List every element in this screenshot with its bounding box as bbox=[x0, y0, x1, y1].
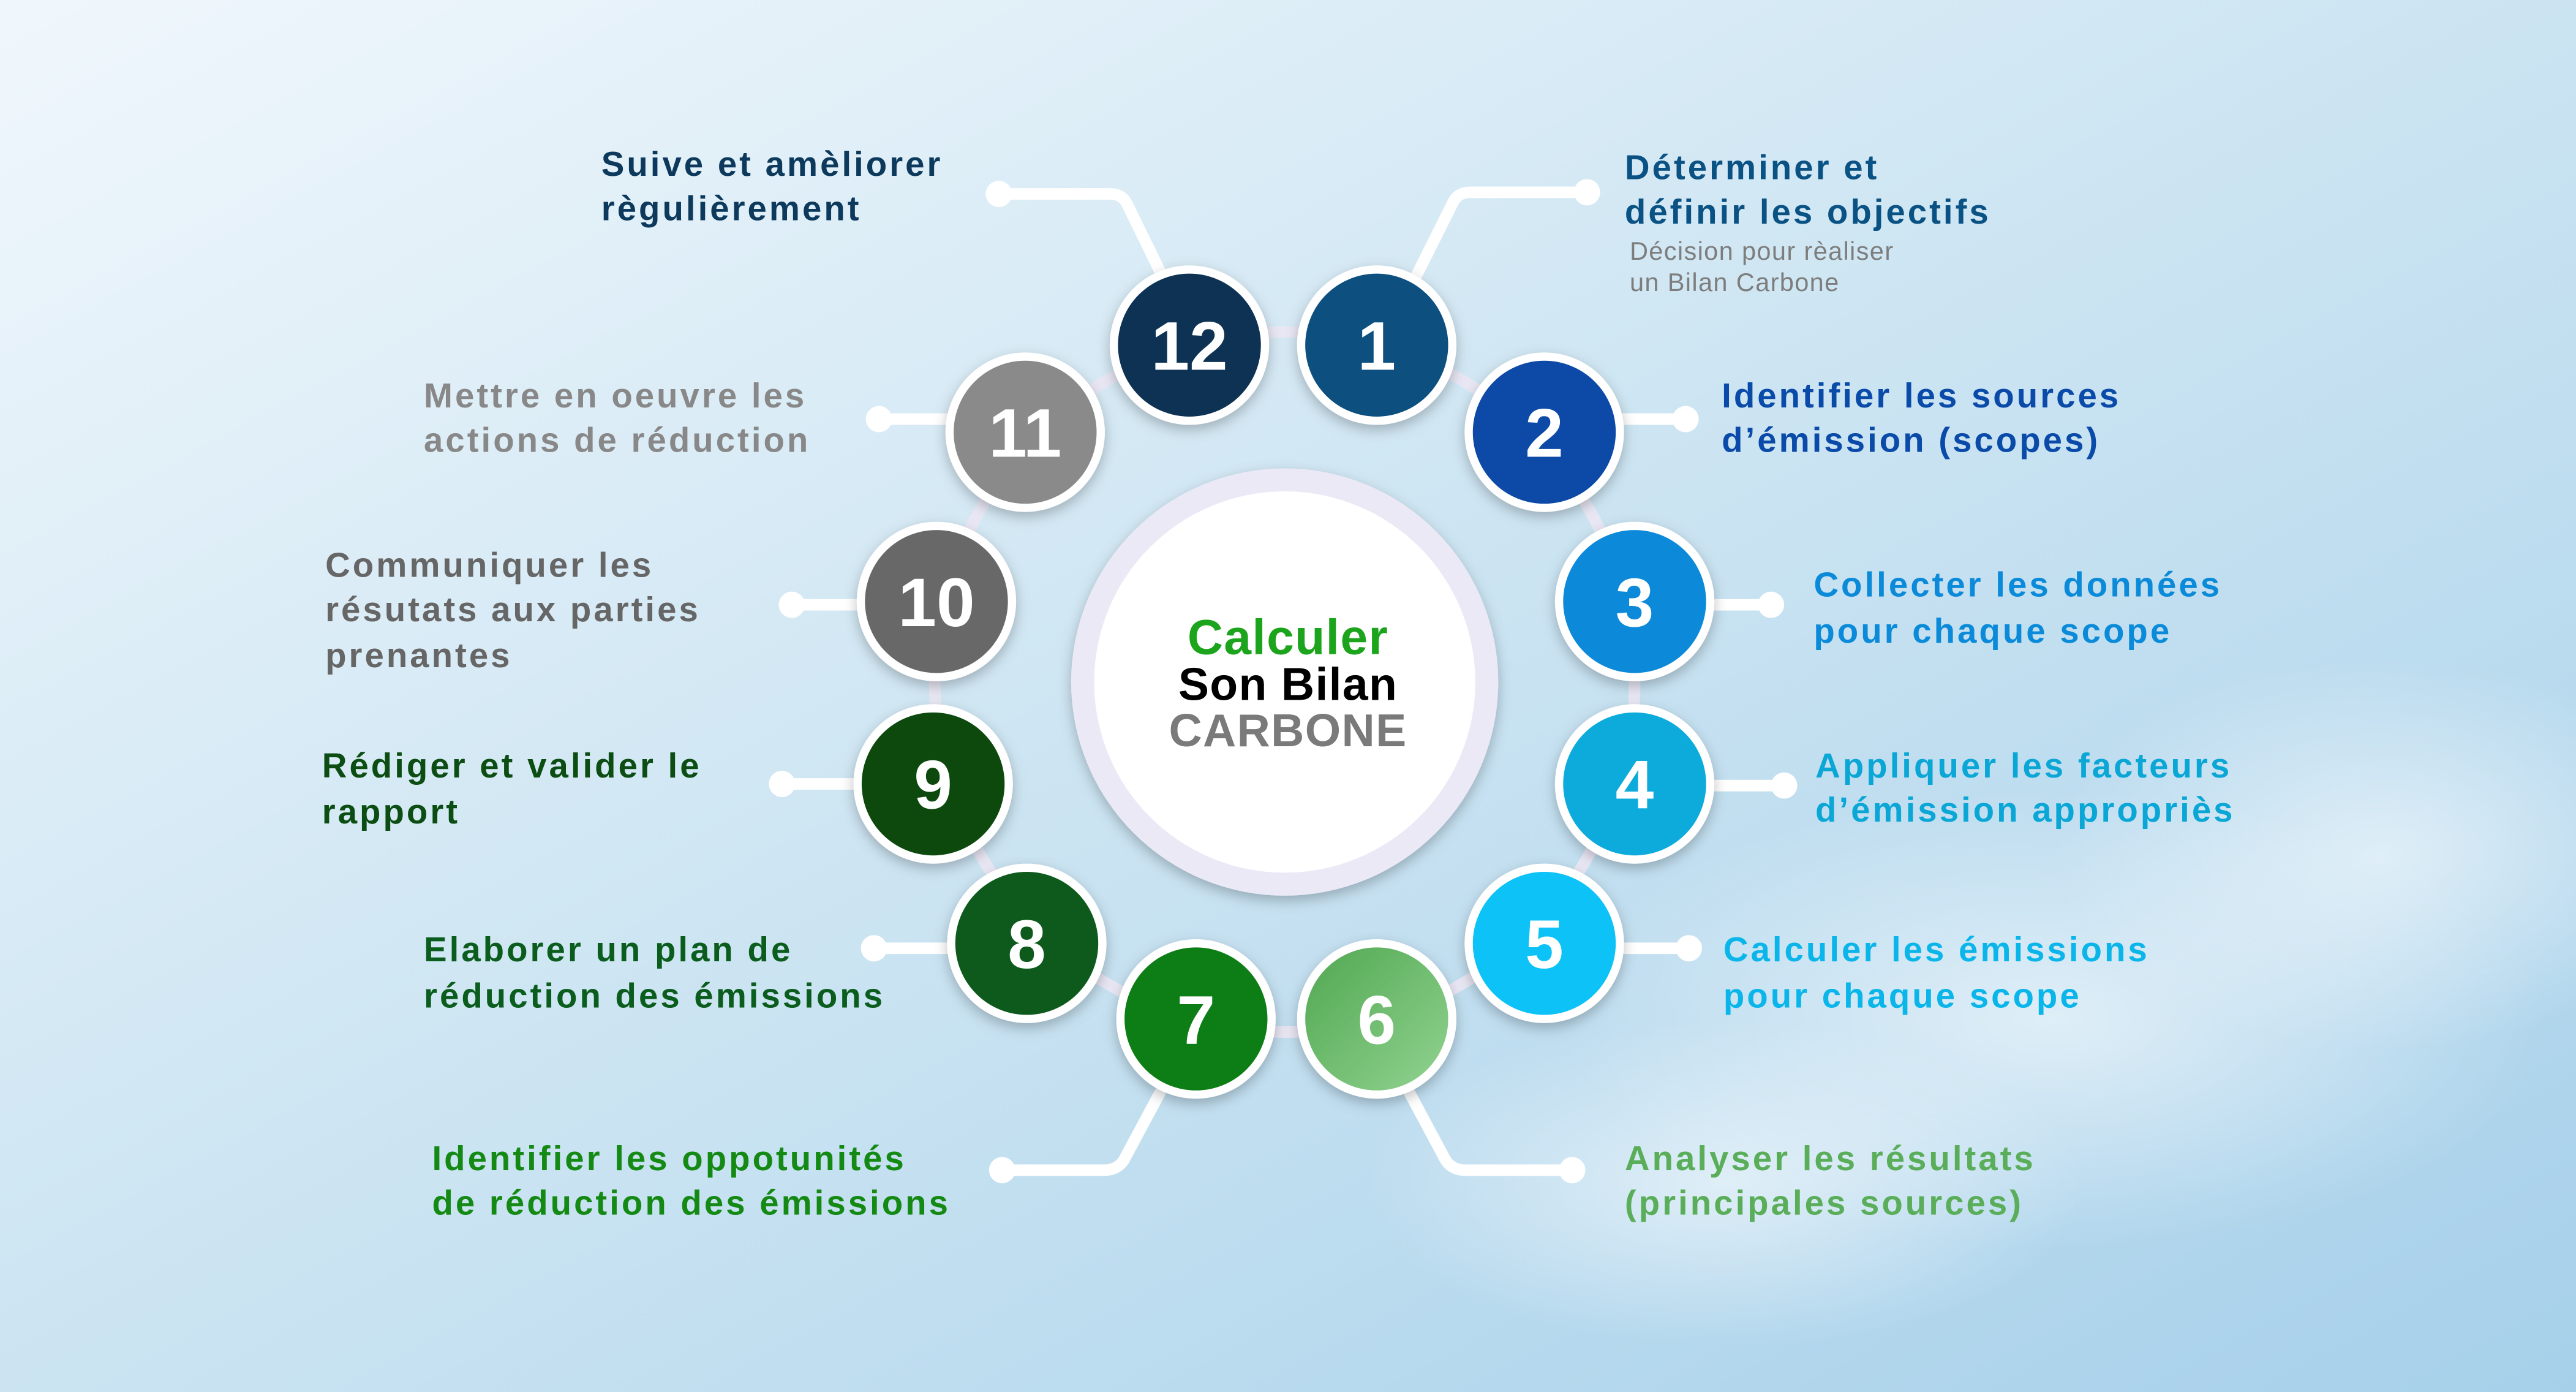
label 1 subtitle: un Bilan Carbone bbox=[1630, 268, 1840, 297]
label 3: Collecter les données bbox=[1813, 566, 2222, 604]
numbers: 1 bbox=[1358, 308, 1396, 385]
label 8: Elaborer un plan de bbox=[424, 930, 793, 969]
label 10: prenantes bbox=[325, 636, 513, 675]
label 7: de réduction des émissions bbox=[432, 1183, 951, 1222]
numbers: 8 bbox=[1007, 906, 1046, 983]
label 2: d’émission (scopes) bbox=[1722, 421, 2100, 460]
numbers: 4 bbox=[1616, 746, 1654, 823]
label 5: Calculer les émissions bbox=[1723, 930, 2150, 969]
center title: Son Bilan bbox=[1178, 659, 1398, 710]
center title: CARBONE bbox=[1169, 705, 1407, 756]
numbers bbox=[898, 308, 1654, 1058]
label 6: Analyser les résultats bbox=[1625, 1139, 2036, 1178]
center circle bbox=[1071, 468, 1498, 896]
label 1 subtitle: Décision pour rèaliser bbox=[1630, 236, 1894, 265]
numbers: 7 bbox=[1177, 981, 1215, 1058]
label 9: rapport bbox=[322, 792, 460, 831]
label 11: actions de réduction bbox=[424, 421, 810, 460]
numbers: 11 bbox=[989, 395, 1061, 472]
label 11: Mettre en oeuvre les bbox=[424, 376, 807, 415]
center title bbox=[1169, 610, 1407, 756]
numbers: 3 bbox=[1616, 564, 1654, 641]
connecting ring bbox=[935, 332, 1635, 1032]
label 1: définir les objectifs bbox=[1625, 192, 1991, 231]
labels bbox=[322, 145, 2235, 1222]
center title: Calculer bbox=[1188, 610, 1388, 665]
numbers: 6 bbox=[1358, 981, 1396, 1058]
label 5: pour chaque scope bbox=[1723, 976, 2082, 1015]
number circles bbox=[857, 270, 1710, 1094]
label 8: réduction des émissions bbox=[424, 976, 885, 1015]
numbers: 9 bbox=[914, 746, 952, 823]
label 9: Rédiger et valider le bbox=[322, 746, 702, 785]
numbers: 5 bbox=[1525, 906, 1564, 983]
label 3: pour chaque scope bbox=[1813, 611, 2172, 650]
label 1: Déterminer et bbox=[1625, 148, 1879, 186]
label 6: (principales sources) bbox=[1625, 1183, 2024, 1222]
label 4: d’émission appropriès bbox=[1815, 790, 2235, 829]
label 12: règulièrement bbox=[601, 189, 862, 227]
label 10: résutats aux parties bbox=[325, 590, 701, 629]
label 4: Appliquer les facteurs bbox=[1815, 746, 2232, 785]
label 7: Identifier les oppotunités bbox=[432, 1139, 906, 1178]
label 2: Identifier les sources bbox=[1722, 376, 2121, 415]
numbers: 12 bbox=[1151, 308, 1228, 385]
numbers: 10 bbox=[898, 564, 975, 641]
label 12: Suive et amèliorer bbox=[601, 145, 943, 183]
connectors bbox=[782, 192, 1784, 1170]
label 10: Communiquer les bbox=[325, 546, 653, 584]
numbers: 2 bbox=[1525, 395, 1564, 472]
